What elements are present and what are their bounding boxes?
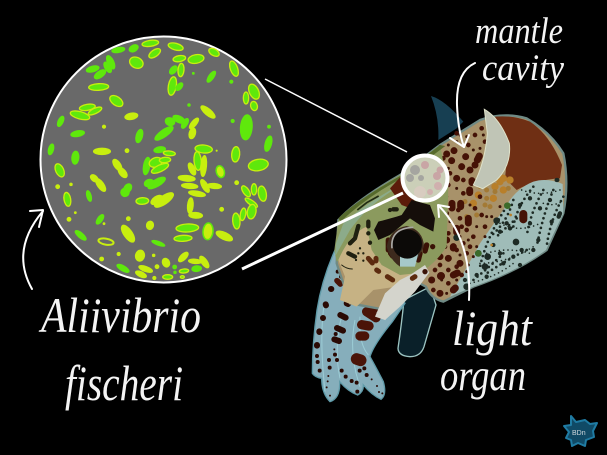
head [334, 145, 448, 277]
dark green head ridge [338, 145, 445, 222]
squid fin and funnel [398, 96, 463, 357]
logo [564, 416, 597, 446]
mantle base [337, 115, 566, 310]
red mantle patch [495, 116, 562, 190]
logo: BDn [572, 430, 586, 437]
arrow: to mantle cavity [450, 63, 475, 147]
bacteria cells [47, 39, 274, 280]
label: Aliivibrio: Aliivibrio [38, 287, 201, 343]
light organ highlight circle [402, 156, 448, 200]
mantle spots [425, 128, 563, 293]
red patch near light organ [390, 177, 415, 210]
squid arms [312, 250, 413, 402]
label: light: light [452, 300, 533, 356]
pale mantle patch [450, 180, 563, 297]
zoom guide line: upper [265, 79, 407, 152]
white arm base [375, 265, 429, 320]
label: organ: organ [440, 351, 526, 400]
squid body [334, 109, 566, 320]
tan lower head [338, 227, 415, 307]
arrow: to light organ [438, 205, 469, 300]
zoom guide line: lower [242, 193, 403, 269]
head markings [348, 209, 402, 257]
dark pigment around the eye [374, 200, 435, 240]
label: fischeri: fischeri [65, 355, 183, 411]
squid illustration [312, 96, 566, 402]
mantle cavity cartilage [473, 109, 510, 189]
arrow: to bacteria circle [23, 210, 43, 289]
magnified bacteria circle [40, 36, 286, 282]
eye [387, 226, 424, 267]
pale green head stripe [335, 187, 397, 257]
label: mantle: mantle [475, 11, 563, 52]
label: cavity: cavity [482, 48, 565, 89]
